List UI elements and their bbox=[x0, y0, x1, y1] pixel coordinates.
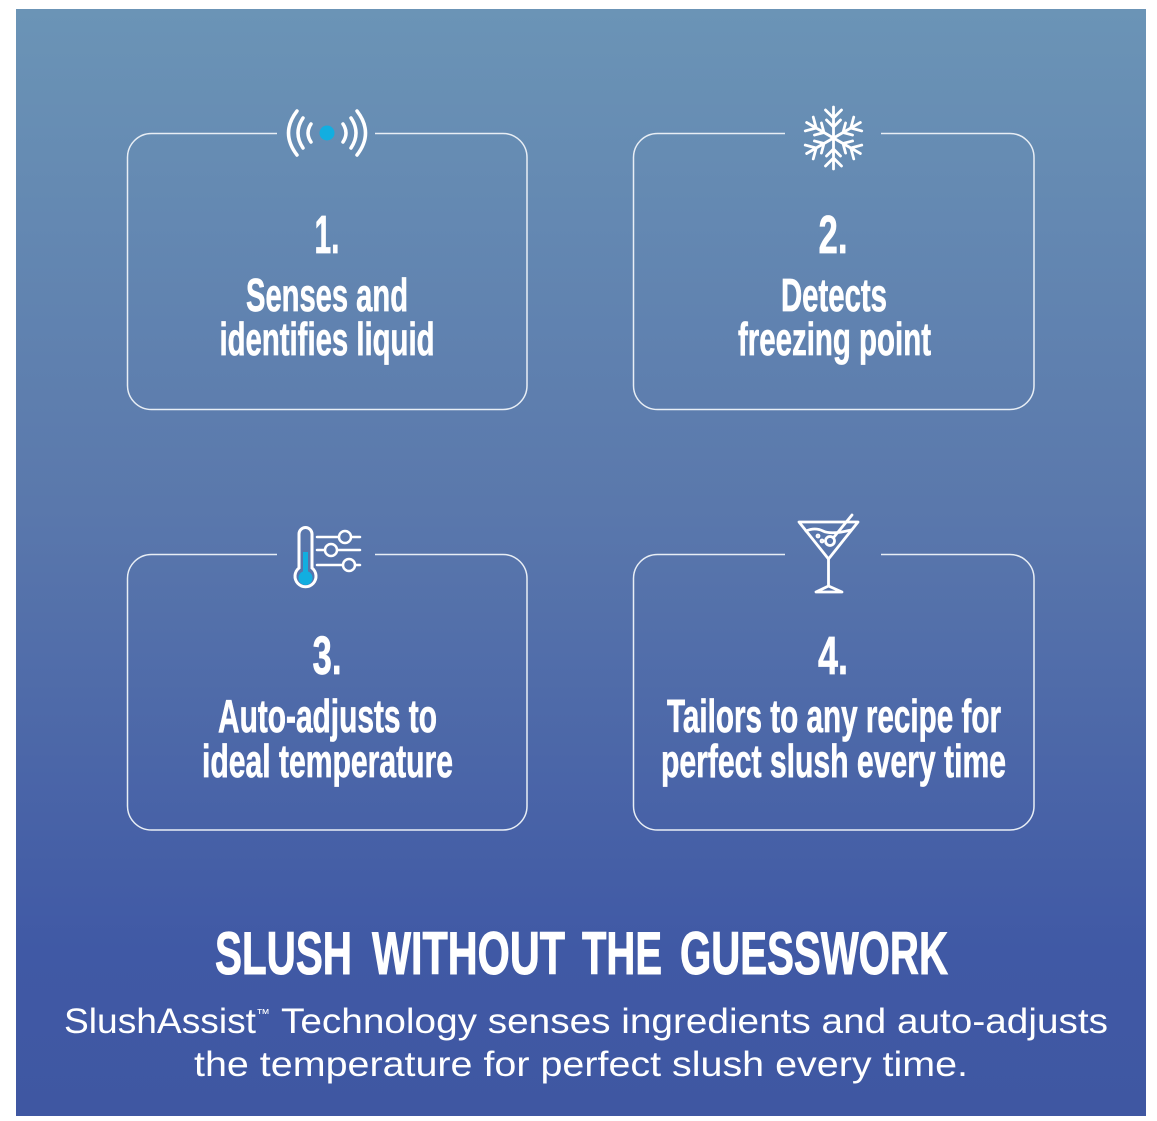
panel: step 3 bbox=[128, 528, 527, 830]
description text bbox=[64, 1002, 1108, 1084]
step 2 text: Detects bbox=[781, 269, 887, 321]
description text: the temperature for perfect slush every time. bbox=[194, 1045, 968, 1084]
card outline 1 bbox=[128, 134, 527, 410]
title: THE bbox=[582, 920, 662, 987]
step 1 text: Senses and bbox=[246, 269, 408, 321]
step 2 text bbox=[738, 269, 931, 365]
step 2 text: freezing point bbox=[738, 313, 931, 365]
icon: signal sensor bbox=[288, 111, 366, 155]
icon: martini glass bbox=[799, 515, 858, 592]
panel: step 2 bbox=[634, 107, 1034, 410]
panel: step 4 bbox=[634, 515, 1034, 830]
icon: snowflake bbox=[803, 107, 864, 169]
step 3 text: Auto-adjusts to bbox=[218, 690, 437, 742]
step number 2: 2. bbox=[818, 205, 848, 265]
card outline 4 bbox=[634, 554, 1034, 830]
title: SLUSH bbox=[215, 920, 352, 987]
icon: thermometer with sliders bbox=[295, 528, 360, 587]
step number 3: 3. bbox=[312, 626, 342, 686]
step 1 text bbox=[220, 269, 434, 365]
step 3 text: ideal temperature bbox=[202, 735, 453, 787]
step 3 text bbox=[202, 690, 453, 787]
step 4 text bbox=[661, 690, 1006, 787]
step number 1: 1. bbox=[314, 205, 340, 265]
title: GUESSWORK bbox=[680, 920, 948, 987]
step 1 text: identifies liquid bbox=[220, 313, 434, 365]
description text: SlushAssist bbox=[64, 1002, 256, 1041]
description text: Technology senses ingredients and auto-adjusts bbox=[281, 1002, 1108, 1041]
card outline 3 bbox=[128, 554, 527, 830]
title bbox=[215, 920, 948, 987]
card outline 2 bbox=[634, 134, 1034, 410]
panel: step 1 bbox=[128, 111, 527, 410]
description text: ™ bbox=[256, 1006, 270, 1021]
title: WITHOUT bbox=[372, 920, 565, 987]
step number 4: 4. bbox=[818, 626, 848, 686]
